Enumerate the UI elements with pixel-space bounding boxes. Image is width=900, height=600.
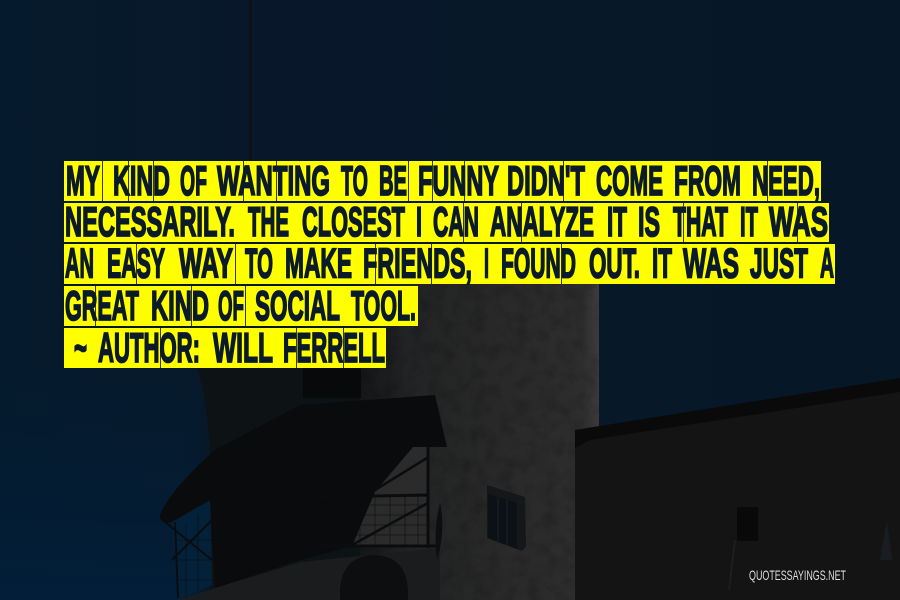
downspout detail [880,520,892,560]
bracket [436,503,442,560]
tower wall texture [360,284,599,600]
quote line 3: TO [245,240,273,286]
watermark: QUOTESSAYINGS.NET [749,567,846,583]
quote line 4 [64,282,418,329]
quote line 3: WAY [179,240,233,286]
right building window [737,507,758,541]
quote line 3: FRIENDS, [363,240,472,286]
author attribution [64,324,386,371]
quote line 1: DIDN'T [507,157,585,204]
right building roof edge [575,378,900,448]
quote line 2 [64,198,829,245]
quote line 2: WAS [769,198,828,245]
mast [249,0,252,165]
right building wall [575,378,900,600]
quote block [64,157,835,371]
quote line 1: FROM [674,157,741,204]
author attribution: WILL [213,324,273,371]
quote line 4: KIND [151,282,209,329]
dark side of tower [197,330,390,600]
poster canvas: A [820,240,834,286]
quote line 2: I [416,198,422,245]
quote line 3: AN [65,240,94,286]
author attribution: FERRELL [283,324,385,371]
lit tower [360,284,599,600]
quote line 1: BE [379,157,407,204]
quote line 2: THE [248,198,289,245]
quote line 2: CAN [433,198,479,245]
author attribution: AUTHOR: [98,324,200,371]
quote line 1: TO [341,157,368,204]
quote line 4: SOCIAL [255,282,340,329]
quote line 2: NECESSARILY. [65,198,235,245]
quote line 3: MAKE [285,240,352,286]
sky seen through balcony [172,490,212,600]
quote line 2: IT [740,198,758,245]
arched doorway [340,555,408,600]
quote line 1: WANTING [217,157,330,204]
upper tower window [303,368,361,398]
author attribution: ~ [74,324,87,371]
quote line 1: MY [66,157,100,204]
quote line 1: COME [596,157,663,204]
quote line 2: IS [638,198,660,245]
quote line 3: EASY [107,240,165,286]
quote line 1 [64,157,821,204]
quote line 3: I [484,240,489,286]
quote line 1: OF [180,157,207,204]
quote line 2: CLOSEST [302,198,405,245]
quote line 2: ANALYZE [490,198,594,245]
quote line 1: FUNNY [418,157,499,204]
quote line 3: JUST [750,240,808,286]
balcony canopy [160,395,447,588]
quote line 4: OF [218,282,244,329]
quote line 2: IT [607,198,627,245]
quote line 3: FOUND [501,240,576,286]
quote line 4: GREAT [65,282,139,329]
balcony railing [160,446,438,598]
tower window [487,485,526,551]
quote line 3 [64,240,835,286]
lower wall below balcony [178,548,440,600]
lit wall behind railing [352,447,428,546]
quote line 1: NEED, [752,157,820,204]
quote line 4: TOOL. [351,282,416,329]
quote line 3: IT [652,240,672,286]
quote line 1: KIND [113,157,170,204]
quote line 3: WAS [683,240,739,286]
pipe detail [728,540,736,590]
quote line 2: THAT [673,198,728,245]
quote line 3: OUT. [589,240,640,286]
lower left sky glow [0,330,200,600]
